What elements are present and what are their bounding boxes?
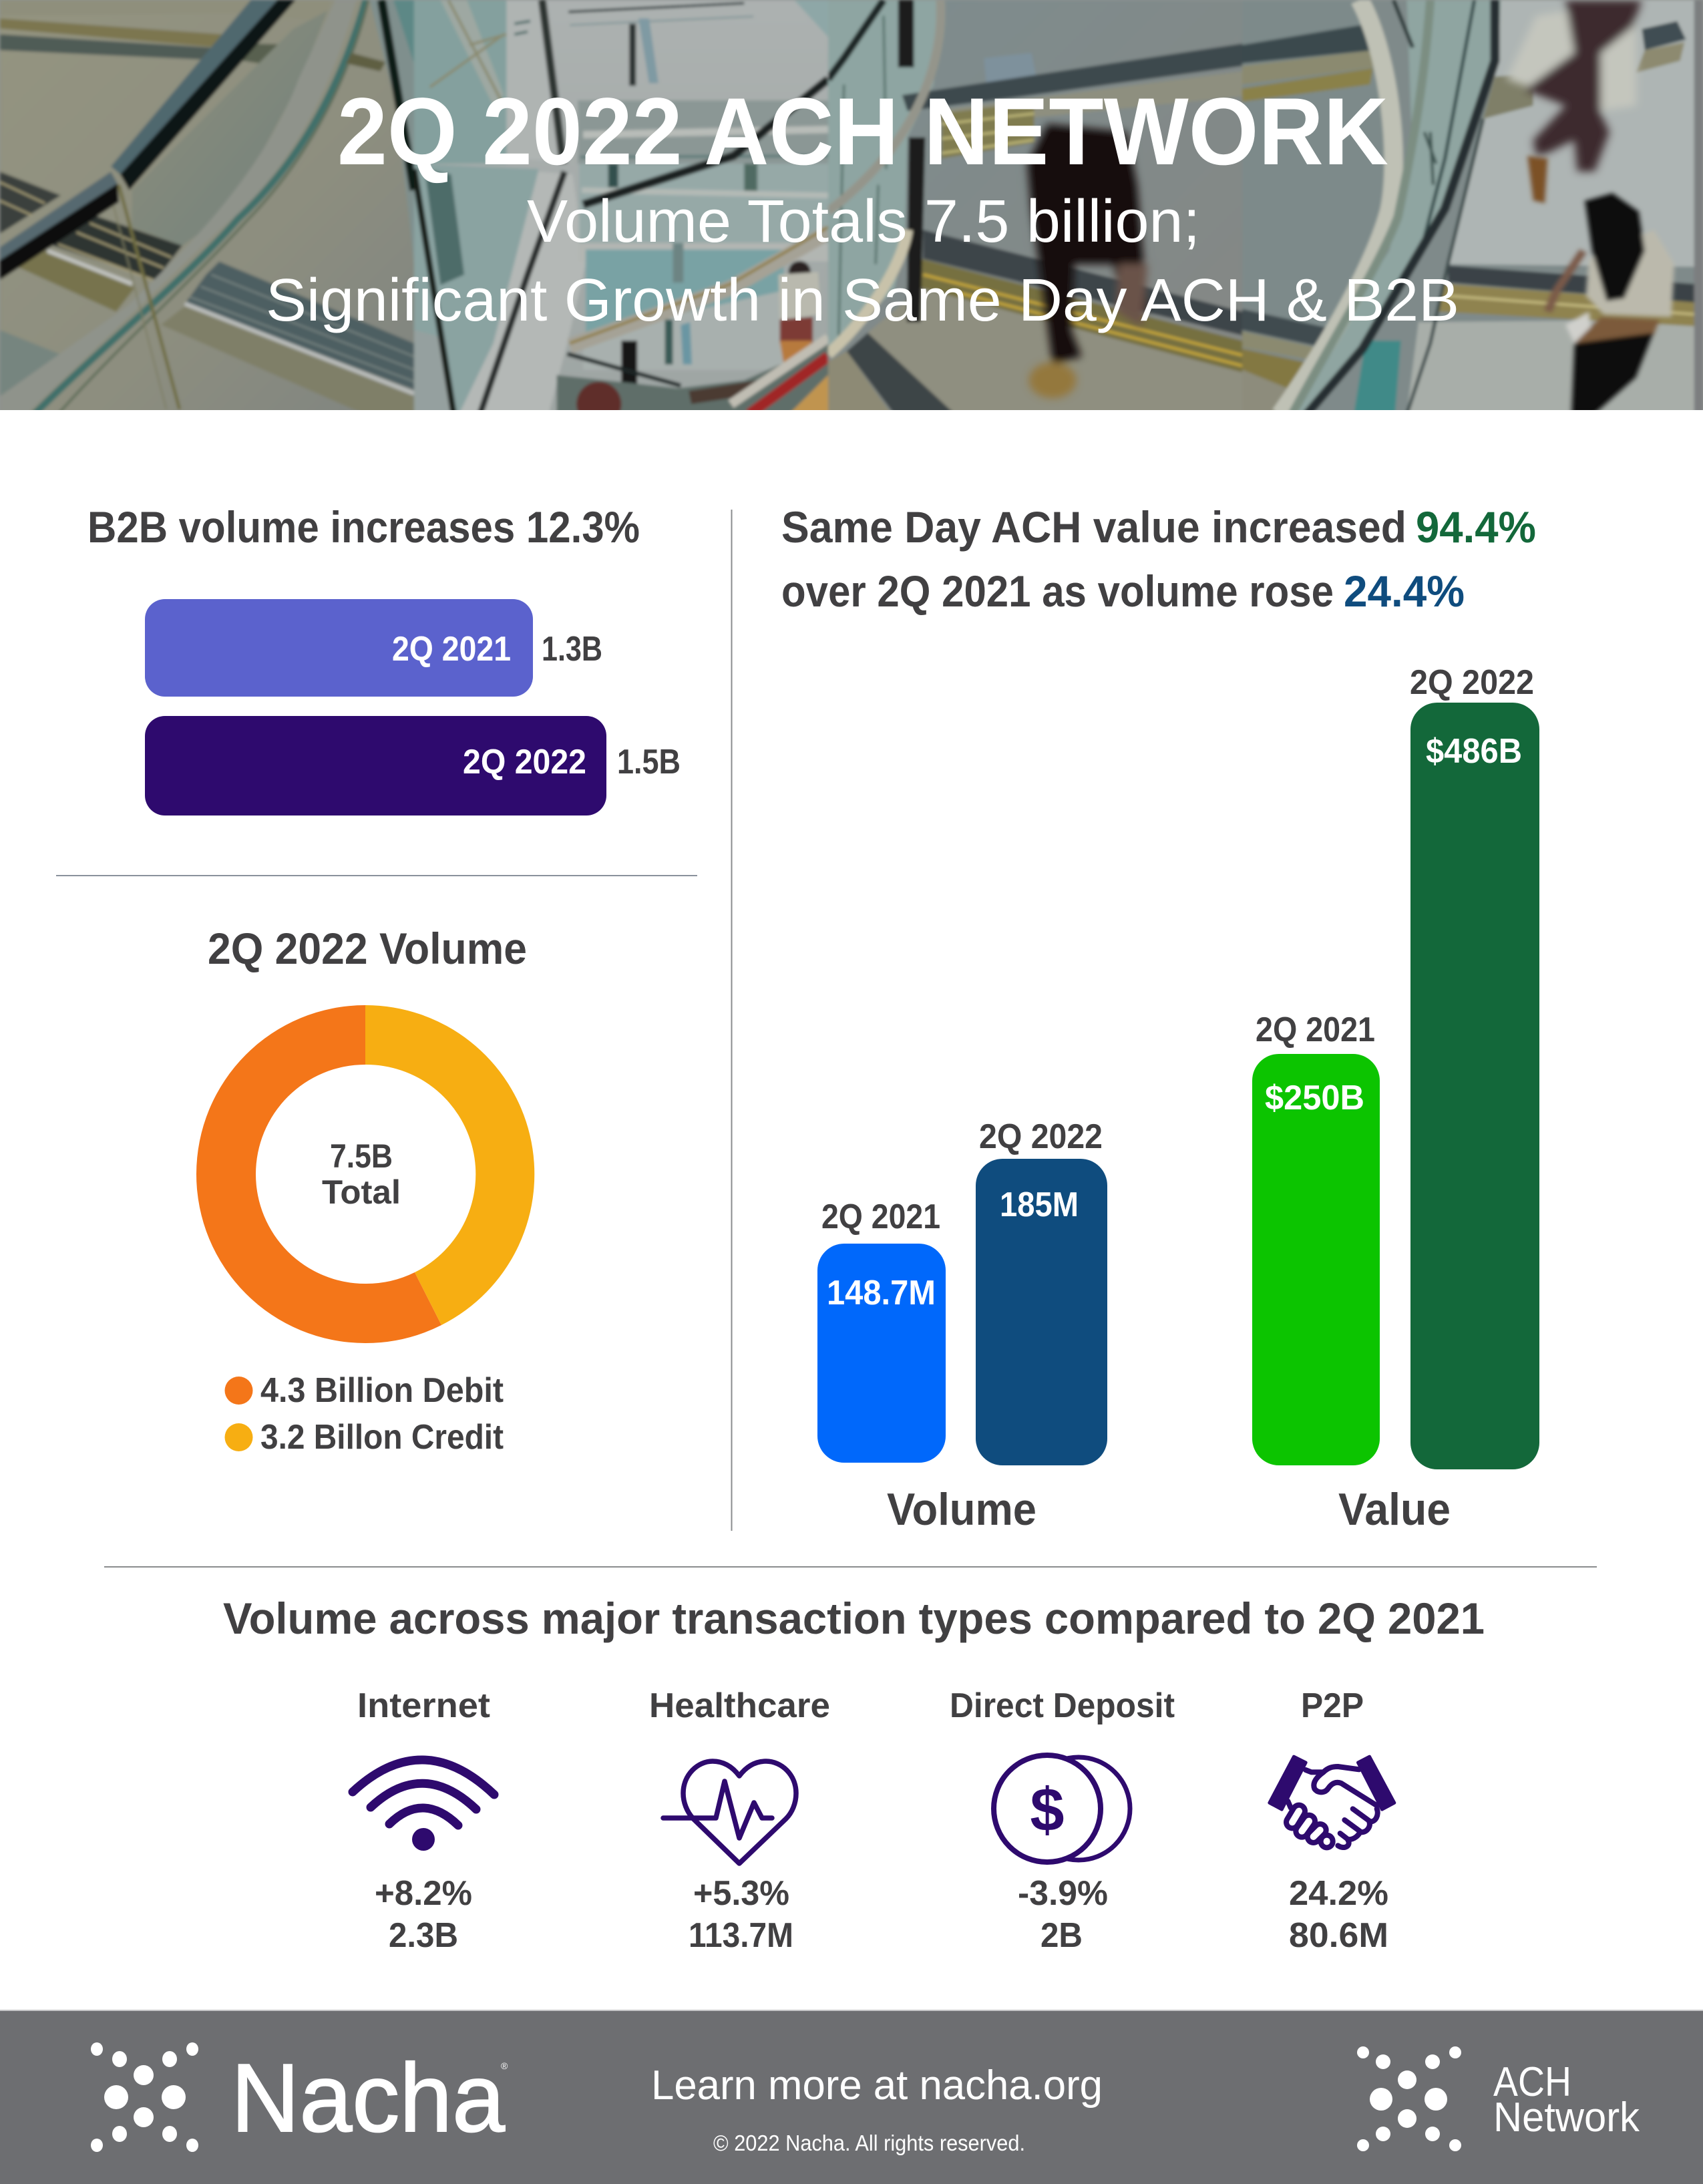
heading: transaction types: Volume across major transaction types compared to 2Q 2021	[223, 1594, 1485, 1643]
logo: Nacha	[91, 2042, 508, 2152]
logo: ACH Network	[1357, 2046, 1640, 2151]
column: Healthcare	[649, 1686, 830, 1955]
bar: volume 2Q 2022	[976, 1117, 1107, 1465]
column: Internet: 2.3B	[389, 1916, 458, 1955]
donut chart	[196, 1005, 534, 1343]
icon: wifi	[353, 1760, 494, 1851]
axis label: Value: Value	[1338, 1484, 1451, 1535]
footer link text: Learn more at nacha.org	[651, 2062, 1103, 2109]
icon: coins	[994, 1755, 1130, 1862]
icon: coins: $	[1030, 1776, 1065, 1844]
donut chart: Total	[322, 1173, 401, 1211]
icon: handshake	[1270, 1757, 1394, 1847]
column: P2P: 80.6M	[1289, 1916, 1388, 1955]
panel: B2B volume	[87, 502, 681, 815]
copyright: © 2022 Nacha. All rights reserved.	[713, 2131, 1025, 2155]
column: Internet: +8.2%	[375, 1874, 472, 1913]
heading: Same Day ACH: over 2Q 2021 as volume rose	[781, 566, 1334, 616]
column: Direct Deposit: Direct Deposit	[950, 1686, 1175, 1725]
donut chart: 7.5B	[330, 1137, 393, 1175]
legend: 4.3 Billion Debit	[260, 1371, 504, 1410]
icon: heart pulse	[663, 1761, 796, 1863]
footer	[0, 2010, 1703, 2184]
bar: value 2Q 2022	[1410, 663, 1539, 1469]
heading: B2B volume: B2B volume increases 12.3%	[87, 502, 640, 552]
subtitle: Volume Totals 7.5 billion;	[527, 188, 1200, 255]
heading: Same Day ACH: 24.4%	[1344, 566, 1465, 616]
heading: Same Day ACH	[781, 502, 1536, 616]
panel: Same Day ACH	[781, 502, 1539, 1535]
heading: Same Day ACH: 94.4%	[1416, 502, 1536, 552]
heading: Same Day ACH: Same Day ACH value increased	[781, 502, 1406, 552]
bar: 2Q 2022 B2B	[145, 716, 681, 815]
title: 2Q 2022 ACH NETWORK	[337, 79, 1388, 185]
bar: volume 2Q 2022: 185M	[1000, 1186, 1079, 1224]
column: Healthcare: +5.3%	[693, 1874, 789, 1913]
axis label: Volume: Volume	[887, 1484, 1036, 1535]
column: Healthcare: 113.7M	[689, 1916, 793, 1955]
column: P2P: P2P	[1301, 1686, 1364, 1725]
logo: ACH Network: Network	[1493, 2095, 1640, 2141]
logo: ACH Network: ACH	[1493, 2059, 1571, 2105]
column: Internet	[353, 1686, 494, 1955]
column: Direct Deposit: 2B	[1040, 1916, 1083, 1955]
column: Internet: Internet	[357, 1686, 490, 1725]
subtitle	[266, 188, 1459, 334]
panel: transaction types	[223, 1594, 1485, 1955]
subtitle: Significant Growth in Same Day ACH & B2B	[266, 267, 1459, 334]
bar: value 2Q 2021: $250B	[1265, 1079, 1364, 1117]
bar: 2Q 2021 B2B	[145, 599, 602, 697]
bar: value 2Q 2022: $486B	[1426, 732, 1522, 771]
bar: value 2Q 2021	[1252, 1011, 1380, 1465]
legend: 3.2 Billon Credit	[260, 1418, 504, 1457]
panel: 2Q 2022 volume donut	[196, 924, 534, 1457]
bar: 2Q 2022 B2B: 1.5B	[617, 743, 681, 781]
bar: 2Q 2021 B2B: 1.3B	[542, 630, 602, 669]
heading: 2Q 2022 Volume: 2Q 2022 Volume	[208, 924, 527, 973]
column: Direct Deposit	[950, 1686, 1175, 1955]
column: P2P: 24.2%	[1289, 1874, 1388, 1913]
column: Direct Deposit: -3.9%	[1018, 1874, 1108, 1913]
bar: volume 2Q 2021: 2Q 2021	[821, 1198, 940, 1236]
bar: volume 2Q 2022: 2Q 2022	[979, 1117, 1103, 1156]
bar: 2Q 2022 B2B: 2Q 2022	[463, 743, 586, 781]
column: Healthcare: Healthcare	[649, 1686, 830, 1725]
bar: value 2Q 2021: 2Q 2021	[1256, 1011, 1375, 1049]
bar: value 2Q 2022: 2Q 2022	[1410, 663, 1534, 702]
logo: Nacha: ®	[501, 2060, 508, 2071]
legend	[224, 1371, 504, 1457]
header photo banner	[0, 0, 1703, 427]
logo: Nacha: Nacha	[231, 2044, 505, 2152]
bar: volume 2Q 2021	[817, 1198, 946, 1463]
column: P2P	[1270, 1686, 1394, 1955]
bar: volume 2Q 2021: 148.7M	[827, 1274, 936, 1312]
bar: 2Q 2021 B2B: 2Q 2021	[392, 630, 511, 669]
